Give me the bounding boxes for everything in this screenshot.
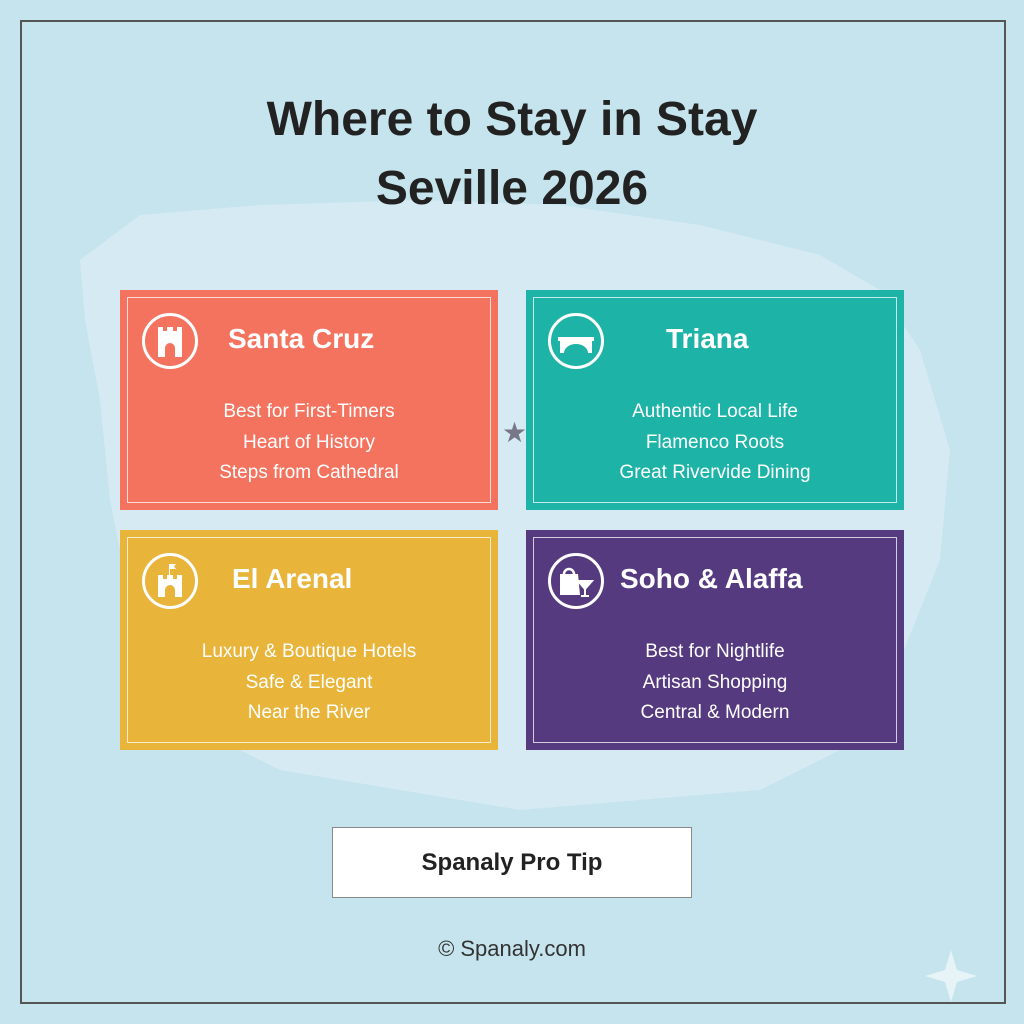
panel: Soho & Alaffa <box>526 530 904 750</box>
panel: El Arenal <box>120 530 498 750</box>
icon: shopping and cocktail <box>548 553 604 609</box>
text: Artisan Shopping <box>643 672 787 692</box>
text: Luxury & Boutique Hotels <box>202 641 416 662</box>
title <box>266 93 758 215</box>
heading: Soho & Alaffa <box>620 563 803 594</box>
text <box>219 401 399 483</box>
panel: Triana <box>526 290 904 510</box>
icon: tower <box>142 553 198 609</box>
text: Best for First-Timers <box>223 401 395 422</box>
icon: bridge <box>548 313 604 369</box>
text <box>619 401 811 483</box>
title: Where to Stay in Stay <box>267 93 757 146</box>
text: Great Rivervide Dining <box>619 462 811 483</box>
text <box>202 641 416 723</box>
text: Safe & Elegant <box>246 672 372 692</box>
text: Best for Nightlife <box>645 641 785 662</box>
text: Authentic Local Life <box>632 401 798 422</box>
text: Flamenco Roots <box>646 432 784 452</box>
pro tip box <box>332 827 692 898</box>
text: Steps from Cathedral <box>219 462 399 483</box>
icon: castle <box>142 313 198 369</box>
text: Central & Modern <box>641 702 789 723</box>
pro tip box: Spanaly Pro Tip <box>422 849 602 876</box>
heading: Triana <box>666 323 748 354</box>
icon: star: ★ <box>502 417 527 448</box>
footer: © Spanaly.com <box>438 936 586 961</box>
heading: El Arenal <box>232 563 352 594</box>
text: Near the River <box>248 702 370 723</box>
panel: Santa Cruz <box>120 290 498 510</box>
text: Heart of History <box>243 432 375 452</box>
text <box>641 641 789 723</box>
heading: Santa Cruz <box>228 323 374 354</box>
title: Seville 2026 <box>376 162 648 215</box>
